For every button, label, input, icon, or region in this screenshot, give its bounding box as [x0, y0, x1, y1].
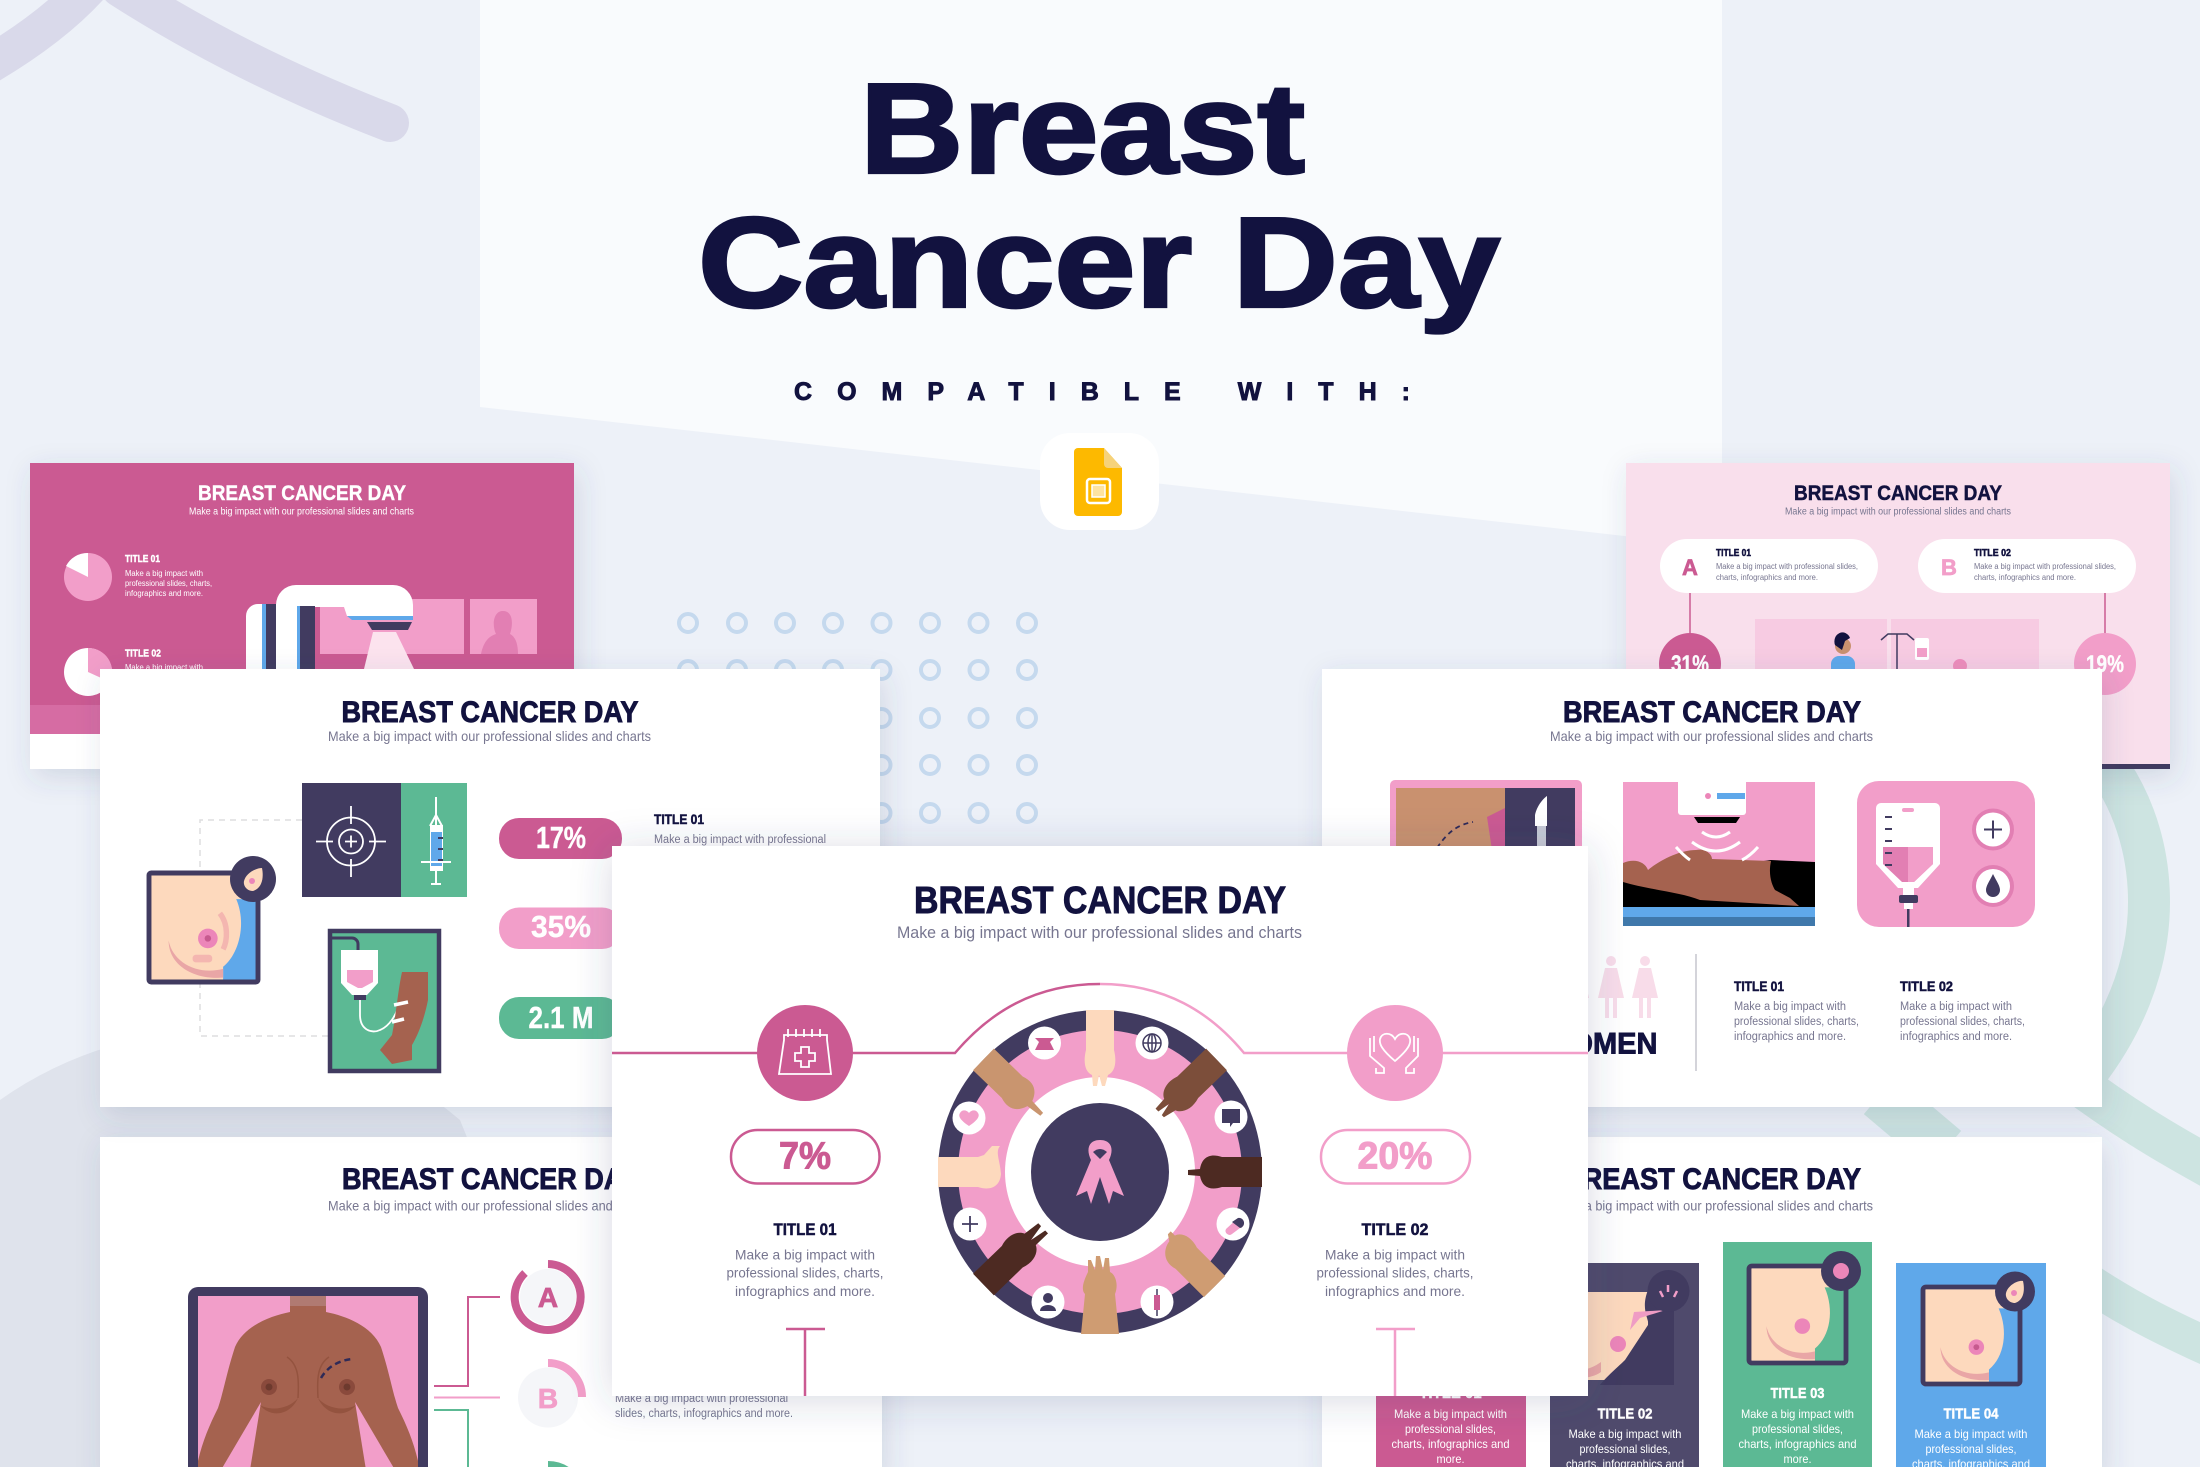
text: title 02: professional slides, charts, [1316, 1264, 1474, 1280]
panel: bottom right slide [1322, 1137, 2102, 1467]
icon: google slides [1040, 433, 1159, 530]
stat: 7%: 7% [779, 1136, 831, 1178]
stat: 20%: 20% [1358, 1136, 1432, 1178]
subheading: Make a big impact with our professional slides and charts [328, 728, 651, 744]
stat: 19% [2074, 633, 2136, 695]
stat: 2.1M [499, 997, 622, 1039]
text: title 02 [1900, 978, 2025, 1043]
small icon glyphs [959, 1034, 1244, 1316]
connectors [434, 1297, 500, 1467]
text: title 01: TITLE 01 [774, 1220, 836, 1239]
title [698, 58, 1500, 335]
callout B: charts, infographics and more. [1974, 573, 2076, 582]
callout A [1660, 539, 1878, 593]
text: title 01: TITLE 01 [125, 554, 160, 565]
text: title 01: TITLE 01 [1734, 978, 1784, 994]
text: title 02: infographics and more. [1900, 1031, 2012, 1043]
text block: TITLE 01 [654, 811, 704, 827]
card: title 03 [1723, 1242, 1872, 1467]
dashed guide [200, 820, 330, 1036]
dot grid [679, 614, 1036, 822]
text: title 02 [125, 648, 203, 672]
panel: center slide [612, 846, 1588, 1396]
text: title 02: TITLE 02 [1900, 978, 1953, 994]
card: title 03: charts, infographics and [1738, 1437, 1856, 1451]
callout B: TITLE 02 [1974, 548, 2011, 559]
illustration: IV panel [1857, 781, 2035, 927]
text: title 01 [726, 1220, 884, 1299]
illustration: surgery [1390, 780, 1582, 870]
title: Breast [860, 58, 1305, 201]
heading: BREAST CANCER DAY [1563, 1163, 1861, 1196]
text: title 01: infographics and more. [1734, 1031, 1846, 1043]
text: title 01 [1734, 978, 1859, 1043]
heading: BREAST CANCER DAY [198, 482, 406, 505]
card: title 01 [1376, 1380, 1526, 1467]
marker B [518, 1363, 582, 1428]
hand: top left [972, 1048, 1052, 1127]
card: title 02 [1550, 1263, 1699, 1467]
card: title 02: Make a big impact with [1568, 1427, 1682, 1441]
pie chart 1 [64, 553, 112, 601]
card: title 01: more. [1436, 1452, 1464, 1466]
text: title 02: infographics and more. [1325, 1283, 1465, 1299]
hand: top right [1149, 1048, 1228, 1126]
text: title 01: professional slides, charts, [125, 579, 212, 588]
hand: left [938, 1146, 1001, 1188]
card: title 04 [1896, 1263, 2046, 1467]
callout B: B [1941, 555, 1957, 580]
text: title 02: Make a big impact with [125, 663, 203, 672]
background: light top panel [480, 0, 1722, 547]
text block: Make a big impact with professional [654, 834, 826, 846]
panel: light pink slide [1626, 463, 2170, 769]
illustration: hospital room [1755, 619, 2039, 674]
background: lavender strokes [0, 0, 390, 123]
callout B: Make a big impact with professional slides, [1974, 562, 2116, 571]
text: title 02 [1316, 1220, 1474, 1299]
card: title 03: TITLE 03 [1770, 1385, 1824, 1402]
illustration: target and syringe [302, 783, 467, 897]
hand: bottom left [972, 1216, 1054, 1296]
hand: top [1085, 1010, 1115, 1086]
illustration: IV drip [330, 931, 439, 1071]
card: title 03: Make a big impact with [1741, 1407, 1854, 1421]
icon: ribbon [1076, 1140, 1124, 1204]
card: title 01: Make a big impact with [1394, 1407, 1507, 1421]
stat: 17% [499, 818, 622, 859]
marker B: B [538, 1383, 558, 1414]
panel: pink slide [30, 463, 574, 769]
callout A: TITLE 01 [1716, 548, 1751, 559]
panel: upper left slide [100, 669, 880, 1107]
icon: calendar [757, 1005, 853, 1101]
card: title 02: professional slides, [1580, 1442, 1670, 1456]
text block [615, 1393, 793, 1420]
illustration: breast frame [149, 856, 276, 982]
icon: women figures [1563, 956, 1658, 1018]
card: title 03: professional slides, [1752, 1422, 1843, 1436]
pointer: left [786, 1329, 825, 1396]
text: title 01: professional slides, charts, [726, 1264, 884, 1280]
icon: heart in hands [1347, 1005, 1443, 1101]
card: title 01: charts, infographics and [1392, 1437, 1510, 1451]
stat: 35% [499, 908, 622, 949]
panel: upper right slide [1322, 669, 2102, 1107]
hand: right [1188, 1156, 1262, 1189]
callout A: A [1682, 555, 1698, 580]
text: title 01: infographics and more. [735, 1283, 875, 1299]
pie chart 2 [64, 648, 112, 696]
text block [654, 811, 826, 846]
stat: 2.1M: 2.1 M [528, 1000, 594, 1035]
heading: BREAST CANCER DAY [914, 880, 1286, 922]
callout B [1918, 539, 2136, 593]
connector: left [612, 984, 1100, 1053]
card: title 03: more. [1784, 1452, 1812, 1466]
marker A: A [538, 1282, 558, 1313]
callout A: Make a big impact with professional slides, [1716, 562, 1858, 571]
connector: right [1100, 984, 1588, 1053]
text: title 02: Make a big impact with [1325, 1246, 1465, 1262]
chart: hands wheel [938, 1010, 1262, 1334]
heading: BREAST CANCER DAY [1794, 482, 2002, 505]
background: green ring [1880, 740, 2200, 1350]
stat: 20% [1321, 1130, 1470, 1184]
card: title 04: TITLE 04 [1944, 1406, 1999, 1422]
stat: 31%: 31% [1671, 651, 1709, 678]
text: title 01: infographics and more. [125, 589, 203, 598]
text: title 02: professional slides, charts, [1900, 1016, 2025, 1028]
text: title 01 [125, 554, 212, 598]
subheading: Make a big impact with our professional slides and charts [189, 506, 414, 518]
text: title 01: Make a big impact with [735, 1246, 875, 1262]
text: title 02: TITLE 02 [125, 648, 161, 660]
stat: 31% [1659, 633, 1721, 695]
card: title 01: TITLE 01 [1419, 1385, 1482, 1402]
subheading: Make a big impact with our professional slides and charts [328, 1198, 651, 1214]
text: title 01: professional slides, charts, [1734, 1016, 1859, 1028]
subheading: Make a big impact with our professional slides and charts [1785, 506, 2011, 518]
panel: bottom left slide [100, 1137, 882, 1467]
background: grey circle bottom left [0, 1031, 600, 1467]
divider [1695, 954, 1697, 1071]
stat: 7% [731, 1130, 880, 1184]
card: title 01: professional slides, [1405, 1422, 1496, 1436]
stat: 19%: 19% [2086, 651, 2124, 678]
title: Cancer Day [698, 192, 1500, 335]
label: women: WOMEN [1543, 1028, 1658, 1060]
callout A: charts, infographics and more. [1716, 573, 1818, 582]
heading: BREAST CANCER DAY [1563, 696, 1861, 729]
card: title 04: professional slides, [1926, 1442, 2016, 1456]
subheading: Make a big impact with our professional slides and charts [1550, 728, 1873, 744]
illustration: breast scan [1623, 782, 1815, 926]
heading: BREAST CANCER DAY [342, 1163, 639, 1196]
illustration: mammography machine [246, 585, 537, 669]
text: title 01: Make a big impact with [125, 569, 203, 578]
small icon circles [952, 1026, 1250, 1318]
text: title 02: Make a big impact with [1900, 1001, 2012, 1013]
text block: Make a big impact with professional [615, 1393, 788, 1405]
compatible with heading: COMPATIBLE WITH: [794, 378, 1410, 406]
pointer: right [1376, 1329, 1415, 1396]
connectors [1690, 593, 2105, 635]
subheading: Make a big impact with our professional slides and charts [897, 923, 1302, 942]
illustration: torso [188, 1287, 428, 1467]
card: title 02: TITLE 02 [1598, 1406, 1652, 1422]
hand: bottom right [1154, 1225, 1226, 1298]
heading: BREAST CANCER DAY [342, 696, 638, 729]
stat: 35%: 35% [531, 909, 591, 944]
text block: slides, charts, infographics and more. [615, 1408, 793, 1420]
hand: bottom [1081, 1256, 1119, 1334]
text: title 01: Make a big impact with [1734, 1001, 1846, 1013]
text: title 02: TITLE 02 [1362, 1220, 1428, 1239]
marker C [548, 1465, 582, 1467]
stat: 17%: 17% [536, 820, 586, 855]
card: title 04: Make a big impact with [1914, 1427, 2028, 1441]
marker A [515, 1264, 581, 1330]
subheading: Make a big impact with our professional slides and charts [1550, 1198, 1873, 1214]
